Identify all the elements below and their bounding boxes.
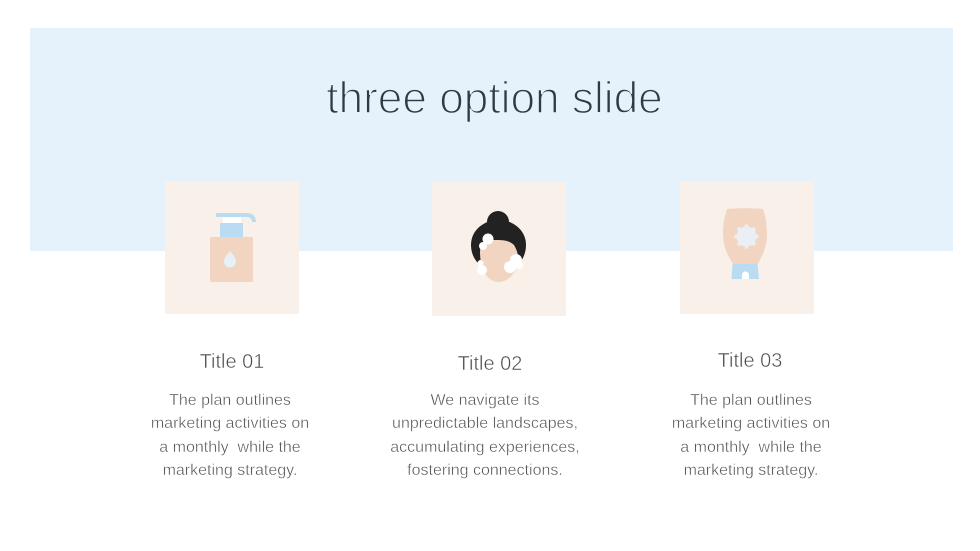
text: option 3 description: marketing strategy. bbox=[684, 462, 818, 479]
heading: Title 03: Title 03 bbox=[718, 350, 782, 372]
text: option 2 description: We navigate its bbox=[430, 392, 540, 409]
icon: pump bottle bbox=[210, 213, 256, 282]
text: option 2 description: fostering connections. bbox=[407, 462, 563, 479]
text: option 1 description: marketing activities on bbox=[151, 415, 309, 432]
text: option 2 description bbox=[390, 392, 580, 479]
text: option 2 description: accumulating experiences, bbox=[390, 439, 580, 456]
text: option 3 description bbox=[672, 392, 830, 479]
icon: face with foam bbox=[471, 211, 526, 282]
text: option 1 description: The plan outlines bbox=[169, 392, 291, 409]
icon: sunscreen tube bbox=[723, 208, 767, 279]
text: option 1 description: a monthly while the bbox=[159, 439, 301, 456]
heading: Title 02: Title 02 bbox=[458, 353, 522, 375]
header band bbox=[30, 28, 953, 251]
title: three option slide bbox=[326, 74, 663, 123]
text: option 1 description bbox=[151, 392, 309, 479]
panel: option 2 icon card bbox=[432, 182, 566, 316]
text: option 3 description: marketing activities on bbox=[672, 415, 830, 432]
text: option 3 description: a monthly while the bbox=[680, 439, 822, 456]
text: option 2 description: unpredictable landscapes, bbox=[392, 415, 578, 432]
heading: Title 01: Title 01 bbox=[200, 351, 264, 373]
text: option 1 description: marketing strategy. bbox=[163, 462, 297, 479]
panel: option 3 icon card bbox=[680, 181, 814, 314]
panel: option 1 icon card bbox=[165, 181, 299, 314]
text: option 3 description: The plan outlines bbox=[690, 392, 812, 409]
